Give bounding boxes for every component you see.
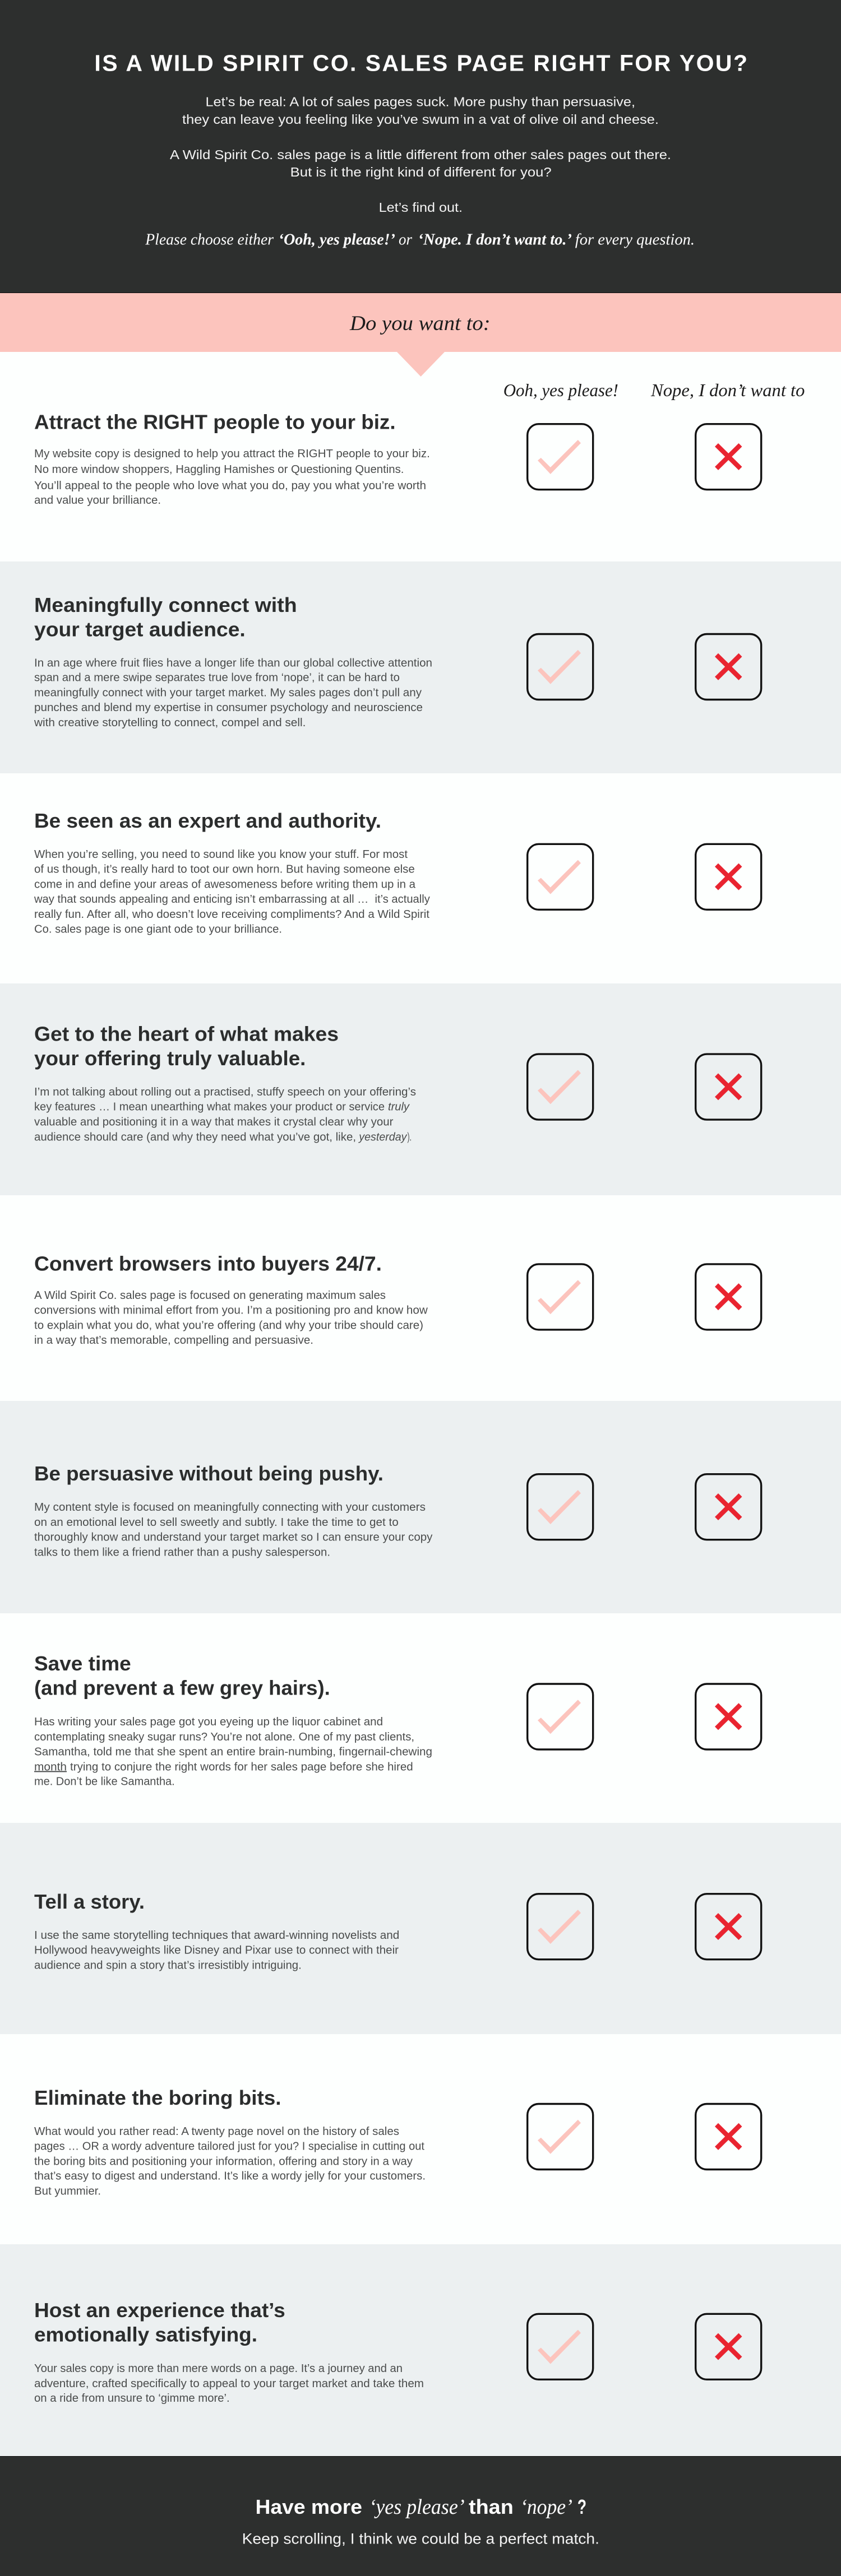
body text: month bbox=[34, 1761, 67, 1773]
body text: Hollywood heavyweights like Disney and Pixar use to connect with their bbox=[34, 1944, 399, 1957]
panel: heart of your offering bbox=[34, 1023, 761, 1143]
heading: Tell a story. bbox=[34, 1890, 145, 1913]
panel: save time bbox=[34, 1652, 761, 1788]
body text: But yummier. bbox=[34, 2185, 101, 2198]
body text: You’ll appeal to the people who love what you do, pay you what you’re worth bbox=[34, 480, 426, 492]
panel: persuasive without pushy bbox=[34, 1462, 761, 1558]
icon: no checkbox bbox=[696, 2314, 761, 2379]
heading: Get to the heart of what makes bbox=[34, 1023, 339, 1046]
icon: no checkbox bbox=[696, 1264, 761, 1330]
body text: pages … OR a wordy adventure tailored just for you? I specialise in cutting out bbox=[34, 2141, 424, 2153]
heading: Eliminate the boring bits. bbox=[34, 2086, 281, 2109]
banner: do you want to: Do you want to: bbox=[349, 312, 491, 335]
body text: the boring bits and positioning your information, offering and story in a way bbox=[34, 2155, 413, 2167]
intro text: But is it the right kind of different for you? bbox=[290, 165, 552, 179]
footer heading: Have more bbox=[256, 2495, 362, 2518]
intro text: they can leave you feeling like you’ve swum in a vat of olive oil and cheese. bbox=[182, 112, 659, 127]
panel: eliminate the boring bits bbox=[34, 2086, 761, 2198]
icon: yes checkbox bbox=[528, 2314, 593, 2379]
body text: truly bbox=[388, 1101, 410, 1113]
heading bbox=[34, 593, 297, 640]
footer heading: ‘nope’ bbox=[520, 2495, 572, 2519]
footer heading: ‘yes please’ bbox=[369, 2495, 465, 2519]
footer subtext: Keep scrolling, I think we could be a perfect match. bbox=[242, 2530, 599, 2547]
heading: emotionally satisfying. bbox=[34, 2323, 257, 2346]
body text bbox=[34, 2363, 424, 2405]
body text bbox=[34, 1929, 399, 1971]
intro text bbox=[170, 95, 671, 215]
footer heading bbox=[256, 2495, 586, 2519]
icon: yes checkbox bbox=[528, 424, 593, 490]
body text: talks to them like a friend rather than a pushy salesperson. bbox=[34, 1546, 330, 1558]
body text: meaningfully connect with your target market. My sales pages don’t pull any bbox=[34, 686, 422, 699]
icon: yes checkbox bbox=[528, 634, 593, 699]
body text: span and a mere swipe separates true love from ‘nope’, it can be hard to bbox=[34, 672, 400, 684]
instruction line: ‘Ooh, yes please!’ bbox=[279, 231, 395, 249]
body text: yesterday bbox=[358, 1131, 407, 1143]
panel: tell a story bbox=[34, 1890, 761, 1971]
footer heading: than bbox=[469, 2495, 514, 2518]
body text: My website copy is designed to help you attract the RIGHT people to your biz. bbox=[34, 448, 430, 460]
heading bbox=[34, 1023, 339, 1070]
heading: Attract the RIGHT people to your biz. bbox=[34, 411, 396, 434]
heading: Be seen as an expert and authority. bbox=[34, 809, 381, 832]
icon: yes checkbox bbox=[528, 1894, 593, 1960]
icon: no checkbox bbox=[696, 424, 761, 490]
icon: yes checkbox bbox=[528, 844, 593, 909]
body text: A Wild Spirit Co. sales page is focused on generating maximum sales bbox=[34, 1289, 386, 1302]
heading: Meaningfully connect with bbox=[34, 593, 297, 616]
body text bbox=[34, 657, 432, 729]
heading: your offering truly valuable. bbox=[34, 1047, 306, 1070]
body text bbox=[34, 2125, 426, 2198]
intro text: Let’s find out. bbox=[379, 200, 463, 215]
body text: on an emotional level to sell sweetly and subtly. I take the time to get to bbox=[34, 1516, 399, 1529]
body text bbox=[34, 848, 430, 936]
body text: When you’re selling, you need to sound like you know your stuff. For most bbox=[34, 848, 408, 861]
column heading: no: Nope, I don’t want to bbox=[650, 380, 805, 400]
intro text: A Wild Spirit Co. sales page is a little different from other sales pages out there. bbox=[170, 147, 671, 162]
body text: audience should care (and why they need what you’ve got, like, bbox=[34, 1131, 356, 1143]
body text: with creative storytelling to connect, compel and sell. bbox=[34, 717, 306, 729]
body text: audience and spin a story that’s irresistibly intriguing. bbox=[34, 1959, 302, 1971]
icon: yes checkbox bbox=[528, 1474, 593, 1540]
body text: of us though, it’s really hard to toot our own horn. But having someone else bbox=[34, 864, 415, 876]
body text bbox=[34, 1086, 416, 1143]
instruction line: or bbox=[399, 231, 412, 249]
body text: adventure, crafted specifically to appeal to your target market and take them bbox=[34, 2378, 424, 2390]
body text: key features … I mean unearthing what makes your product or service bbox=[34, 1101, 385, 1113]
body text: No more window shoppers, Haggling Hamishes or Questioning Quentins. bbox=[34, 463, 404, 476]
heading: (and prevent a few grey hairs). bbox=[34, 1677, 330, 1700]
body text: I’m not talking about rolling out a practised, stuffy speech on your offering’s bbox=[34, 1086, 416, 1098]
intro text: Let’s be real: A lot of sales pages suck. More pushy than persuasive, bbox=[205, 95, 635, 109]
title: IS A WILD SPIRIT CO. SALES PAGE RIGHT FOR YOU? bbox=[94, 50, 747, 76]
heading bbox=[34, 2299, 285, 2346]
body text: ). bbox=[407, 1131, 412, 1143]
heading bbox=[34, 1652, 330, 1700]
instruction line bbox=[145, 231, 695, 249]
instruction line: Please choose either bbox=[145, 231, 274, 249]
body text bbox=[34, 448, 430, 507]
icon: no checkbox bbox=[696, 1054, 761, 1120]
body text: punches and blend my expertise in consumer psychology and neuroscience bbox=[34, 702, 423, 714]
body text: Has writing your sales page got you eyeing up the liquor cabinet and bbox=[34, 1716, 383, 1728]
icon: yes checkbox bbox=[528, 1684, 593, 1749]
body text: that’s easy to digest and understand. It’s like a wordy jelly for your customers. bbox=[34, 2170, 426, 2183]
heading: Be persuasive without being pushy. bbox=[34, 1462, 383, 1485]
icon: no checkbox bbox=[696, 1684, 761, 1749]
panel: host an experience bbox=[34, 2299, 761, 2405]
body text: valuable and positioning it in a way that makes it crystal clear why your bbox=[34, 1116, 394, 1129]
banner: do you want to bbox=[0, 293, 841, 377]
panel: intro header bbox=[0, 0, 841, 293]
body text: contemplating sneaky sugar runs? You’re not alone. One of my past clients, bbox=[34, 1731, 414, 1743]
body text bbox=[34, 1716, 432, 1788]
body text: Co. sales page is one giant ode to your brilliance. bbox=[34, 923, 282, 936]
icon: yes checkbox bbox=[528, 2104, 593, 2170]
panel: expert and authority bbox=[34, 809, 761, 936]
heading: your target audience. bbox=[34, 618, 246, 640]
panel: meaningfully connect bbox=[34, 593, 761, 729]
instruction line: ‘Nope. I don’t want to.’ bbox=[418, 231, 572, 249]
body text: in a way that’s memorable, compelling and persuasive. bbox=[34, 1334, 313, 1347]
body text: way that sounds appealing and enticing isn’t embarrassing at all … it’s actually bbox=[34, 893, 430, 906]
body text: I use the same storytelling techniques that award-winning novelists and bbox=[34, 1929, 399, 1942]
body text: on a ride from unsure to ‘gimme more’. bbox=[34, 2392, 230, 2405]
icon: no checkbox bbox=[696, 1894, 761, 1960]
panel: attract the right people bbox=[34, 411, 761, 507]
icon: no checkbox bbox=[696, 2104, 761, 2170]
icon: no checkbox bbox=[696, 844, 761, 909]
body text: to explain what you do, what you’re offering (and why your tribe should care) bbox=[34, 1319, 423, 1331]
icon: no checkbox bbox=[696, 1474, 761, 1540]
body text: really fun. After all, who doesn’t love receiving compliments? And a Wild Spirit bbox=[34, 908, 429, 921]
icon: yes checkbox bbox=[528, 1264, 593, 1330]
body text: What would you rather read: A twenty page novel on the history of sales bbox=[34, 2125, 399, 2138]
panel: footer bbox=[0, 2456, 841, 2576]
icon: no checkbox bbox=[696, 634, 761, 699]
body text: come in and define your areas of awesomeness before writing them up in a bbox=[34, 878, 416, 890]
body text: Samantha, told me that she spent an entire brain-numbing, fingernail-chewing bbox=[34, 1746, 432, 1758]
body text bbox=[34, 1289, 428, 1347]
body text: me. Don’t be like Samantha. bbox=[34, 1776, 175, 1788]
body text: In an age where fruit flies have a longer life than our global collective attention bbox=[34, 657, 432, 669]
column heading: yes: Ooh, yes please! bbox=[503, 380, 618, 400]
body text bbox=[34, 1501, 432, 1558]
panel: convert browsers bbox=[34, 1252, 761, 1347]
body text: trying to conjure the right words for her sales page before she hired bbox=[70, 1761, 413, 1773]
body text: Your sales copy is more than mere words on a page. It’s a journey and an bbox=[34, 2363, 403, 2375]
body text: thoroughly know and understand your target market so I can ensure your copy bbox=[34, 1531, 432, 1543]
heading: Host an experience that’s bbox=[34, 2299, 285, 2322]
heading: Convert browsers into buyers 24/7. bbox=[34, 1252, 382, 1275]
icon: yes checkbox bbox=[528, 1054, 593, 1120]
instruction line: for every question. bbox=[575, 231, 695, 249]
footer heading: ? bbox=[577, 2495, 586, 2518]
heading: Save time bbox=[34, 1652, 131, 1675]
body text: and value your brilliance. bbox=[34, 494, 161, 507]
body text: conversions with minimal effort from you. I’m a positioning pro and know how bbox=[34, 1305, 428, 1317]
body text: My content style is focused on meaningfully connecting with your customers bbox=[34, 1501, 426, 1514]
